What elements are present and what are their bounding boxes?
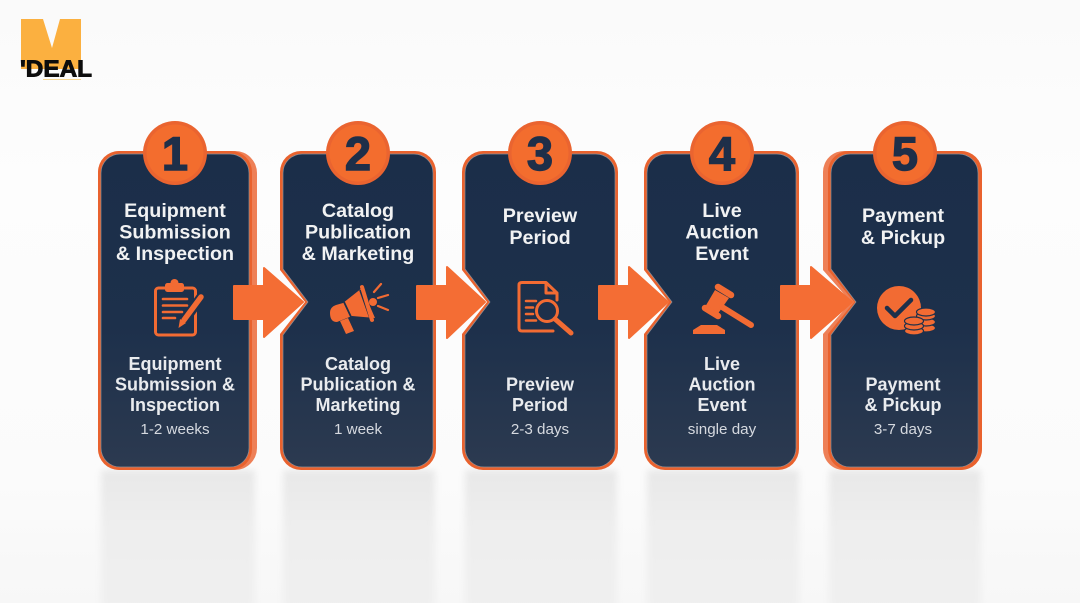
heading 4: Event [695, 243, 749, 265]
heading 4: Live [702, 200, 742, 222]
icon: megaphone [330, 284, 388, 334]
subheading 1: Inspection [130, 395, 220, 415]
heading 2: & Marketing [302, 243, 414, 265]
subheading 5 [864, 374, 942, 415]
icon: document with magnifier [519, 282, 571, 333]
subheading 1 [115, 354, 235, 415]
badge 3: 3 [527, 127, 553, 180]
duration 2: 1 week [334, 421, 382, 438]
icon: gavel [693, 287, 751, 334]
badge 3 [508, 121, 572, 185]
card 1 body [98, 151, 257, 470]
duration 1: 1-2 weeks [140, 421, 210, 438]
subheading 2: Publication & [300, 374, 416, 394]
card 4 body [644, 151, 799, 470]
subheading 5: Payment [865, 374, 941, 394]
panel: step 2 [280, 121, 436, 470]
badge 4 [690, 121, 754, 185]
icon: clipboard and pencil [156, 279, 202, 335]
panel: step 5 [823, 121, 982, 470]
panel: step 4 [644, 121, 799, 470]
subheading 2 [300, 354, 416, 415]
heading 5 [861, 205, 945, 249]
arrow 1 to 2 [234, 268, 303, 337]
subheading 3: Preview [506, 374, 575, 394]
panel: step 1 [98, 121, 257, 470]
subheading 1: Equipment [128, 354, 222, 374]
arrow 2 to 3 [417, 267, 485, 338]
badge 2 [326, 121, 390, 185]
subheading 4: Live [704, 354, 740, 374]
heading 4: Auction [685, 222, 759, 244]
subheading 3 [506, 374, 575, 415]
badge 2: 2 [345, 127, 371, 180]
logo: 'DEAL [20, 56, 92, 82]
badge 5: 5 [892, 127, 918, 180]
icon: check and coins [877, 286, 936, 335]
badge 1 [143, 121, 207, 185]
card 2 body [280, 151, 436, 470]
subheading 1: Submission & [115, 374, 235, 394]
heading 3: Preview [503, 205, 578, 227]
card 5 body [823, 151, 982, 470]
heading 3: Period [509, 227, 571, 249]
floor reflections [101, 470, 981, 603]
logo [20, 19, 92, 82]
subheading 4: Auction [688, 374, 756, 394]
badge 4: 4 [709, 127, 735, 180]
heading 2: Publication [305, 222, 411, 244]
panel: step 3 [462, 121, 618, 470]
subheading 5: & Pickup [864, 395, 942, 415]
duration 4: single day [688, 421, 757, 438]
heading 5: Payment [862, 205, 944, 227]
duration 3: 2-3 days [511, 421, 570, 438]
heading 3 [503, 205, 578, 249]
subheading 3: Period [512, 395, 568, 415]
heading 1: & Inspection [116, 243, 234, 265]
heading 4 [685, 200, 759, 265]
badge 5 [873, 121, 937, 185]
duration 5: 3-7 days [874, 421, 933, 438]
heading 1 [116, 200, 234, 265]
heading 1: Equipment [124, 200, 226, 222]
card 3 body [462, 151, 618, 470]
heading 5: & Pickup [861, 227, 945, 249]
subheading 4 [688, 354, 756, 415]
heading 1: Submission [119, 222, 231, 244]
subheading 4: Event [697, 395, 747, 415]
badge 1: 1 [162, 127, 188, 180]
heading 2: Catalog [322, 200, 394, 222]
heading 2 [302, 200, 414, 265]
subheading 2: Catalog [325, 354, 391, 374]
arrow 3 to 4 [599, 267, 668, 338]
subheading 2: Marketing [315, 395, 401, 415]
arrow 4 to 5 [781, 267, 852, 338]
